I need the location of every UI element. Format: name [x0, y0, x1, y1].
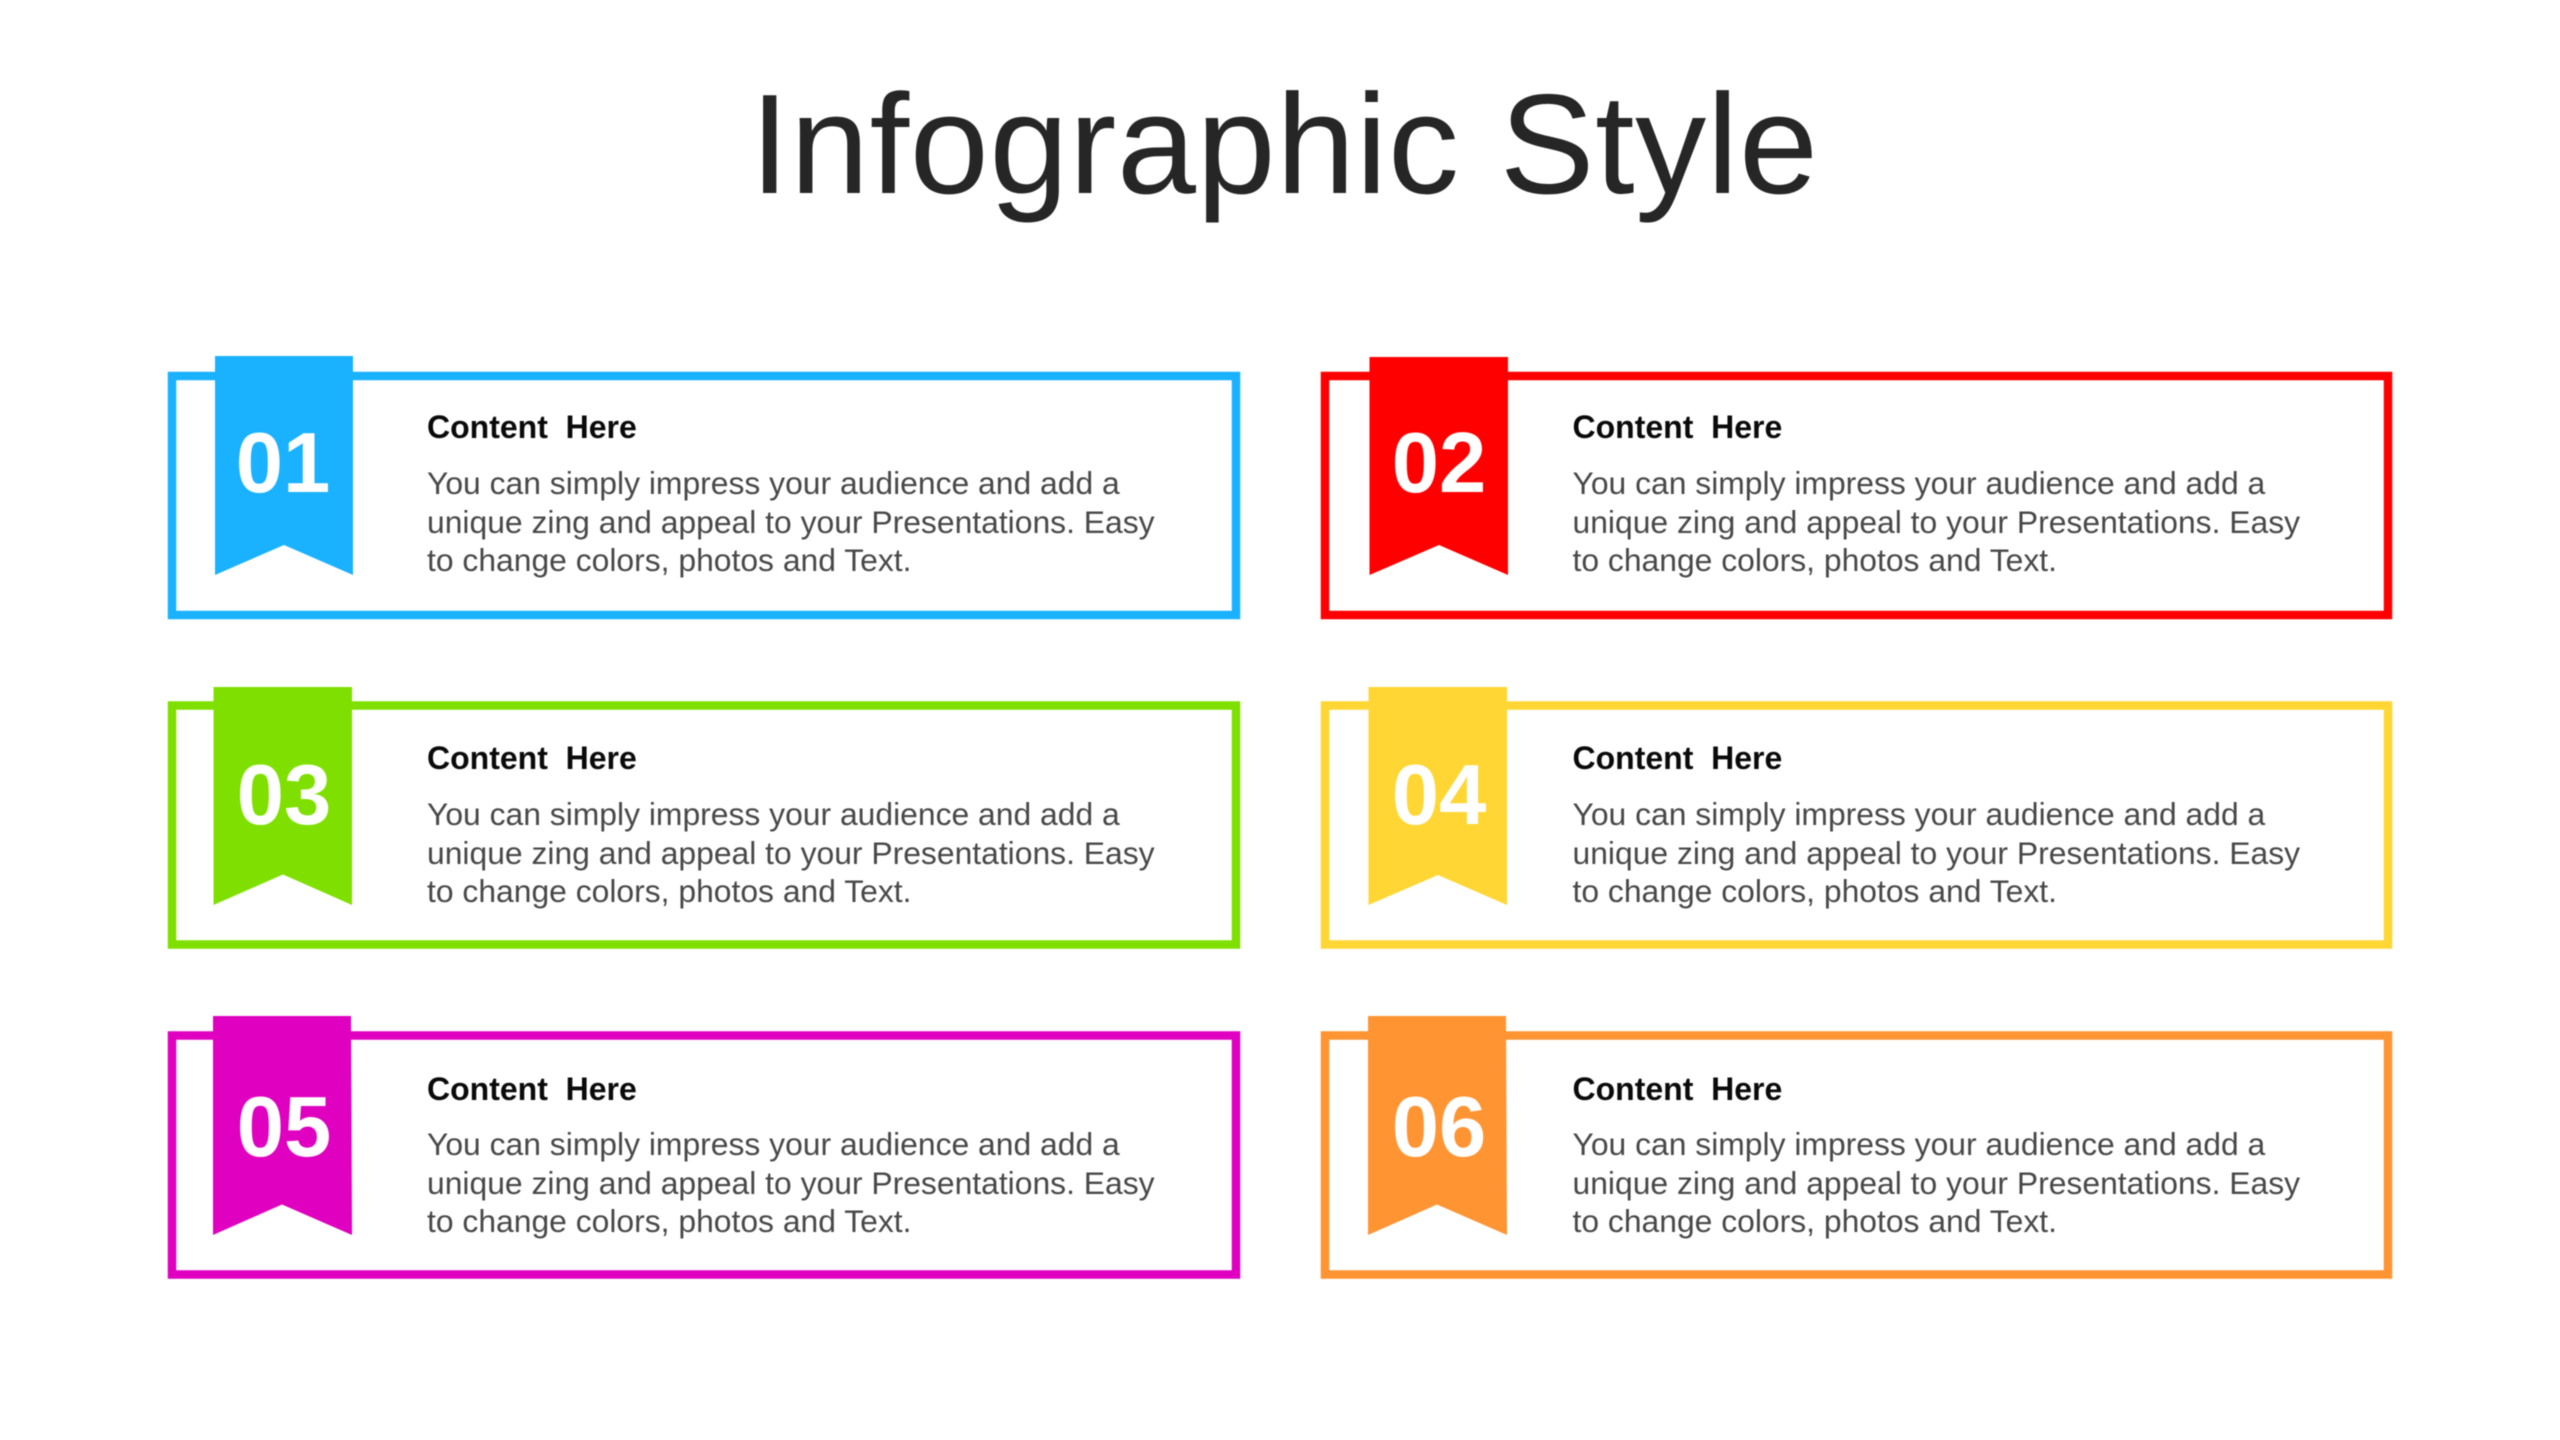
- panel: card 03: [172, 687, 1236, 944]
- card 01 frame: [172, 376, 1236, 615]
- card 04 body text: to change colors, photos and Text.: [1572, 873, 2057, 909]
- panel: card 06: [1325, 1016, 2388, 1274]
- card 03 body text: [427, 796, 1155, 909]
- panel: card 01: [172, 356, 1236, 615]
- card 04 heading: Content Here: [1572, 740, 1782, 776]
- card 04 body text: unique zing and appeal to your Presentations. Easy: [1572, 835, 2300, 871]
- card 04 body text: You can simply impress your audience and add a: [1572, 796, 2266, 832]
- card 04 frame: [1325, 706, 2388, 944]
- card 02 body text: unique zing and appeal to your Presentations. Easy: [1572, 504, 2300, 540]
- panel: card 04: [1325, 687, 2388, 944]
- card 06 body text: to change colors, photos and Text.: [1572, 1203, 2057, 1239]
- number 01: 01: [236, 416, 330, 511]
- number 03: 03: [237, 748, 331, 843]
- card 01 body text: unique zing and appeal to your Presentations. Easy: [427, 504, 1155, 540]
- icon: ribbon 03: [214, 687, 352, 905]
- card 06 heading: Content Here: [1572, 1071, 1782, 1107]
- card 05 body text: to change colors, photos and Text.: [427, 1203, 911, 1239]
- card 04 body text: [1572, 796, 2300, 909]
- card 03 body text: to change colors, photos and Text.: [427, 873, 911, 909]
- card 01 body text: You can simply impress your audience and add a: [427, 465, 1120, 501]
- number 06: 06: [1392, 1080, 1486, 1175]
- card 02 body text: to change colors, photos and Text.: [1572, 542, 2057, 578]
- card 05 body text: [427, 1126, 1155, 1239]
- card 03 body text: unique zing and appeal to your Presentations. Easy: [427, 835, 1155, 871]
- card 02 body text: You can simply impress your audience and add a: [1572, 465, 2266, 501]
- icon: ribbon 06: [1368, 1016, 1507, 1235]
- card 05 body text: You can simply impress your audience and add a: [427, 1126, 1120, 1162]
- icon: ribbon 05: [213, 1016, 352, 1235]
- card 06 body text: unique zing and appeal to your Presentations. Easy: [1572, 1165, 2300, 1201]
- number 02: 02: [1392, 416, 1486, 511]
- card 01 body text: to change colors, photos and Text.: [427, 542, 911, 578]
- icon: ribbon 04: [1368, 687, 1507, 905]
- card 03 body text: You can simply impress your audience and add a: [427, 796, 1120, 832]
- card 06 body text: You can simply impress your audience and add a: [1572, 1126, 2266, 1162]
- icon: ribbon 02: [1370, 357, 1508, 575]
- card 03 heading: Content Here: [427, 740, 637, 776]
- number 05: 05: [237, 1080, 331, 1175]
- card 02 heading: Content Here: [1572, 409, 1782, 445]
- panel: card 05: [172, 1016, 1236, 1274]
- number 04: 04: [1392, 748, 1486, 843]
- card 06 body text: [1572, 1126, 2300, 1239]
- panel: card 02: [1325, 357, 2388, 615]
- card 01 body text: [427, 465, 1155, 578]
- card 02 body text: [1572, 465, 2300, 578]
- card 06 frame: [1325, 1036, 2388, 1274]
- card 05 body text: unique zing and appeal to your Presentations. Easy: [427, 1165, 1155, 1201]
- card 01 heading: Content Here: [427, 409, 637, 445]
- title: Infographic Style: [750, 65, 1818, 224]
- card 02 frame: [1325, 376, 2388, 615]
- card 03 frame: [172, 706, 1236, 944]
- card 05 heading: Content Here: [427, 1071, 637, 1107]
- card 05 frame: [172, 1036, 1236, 1274]
- icon: ribbon 01: [215, 356, 353, 575]
